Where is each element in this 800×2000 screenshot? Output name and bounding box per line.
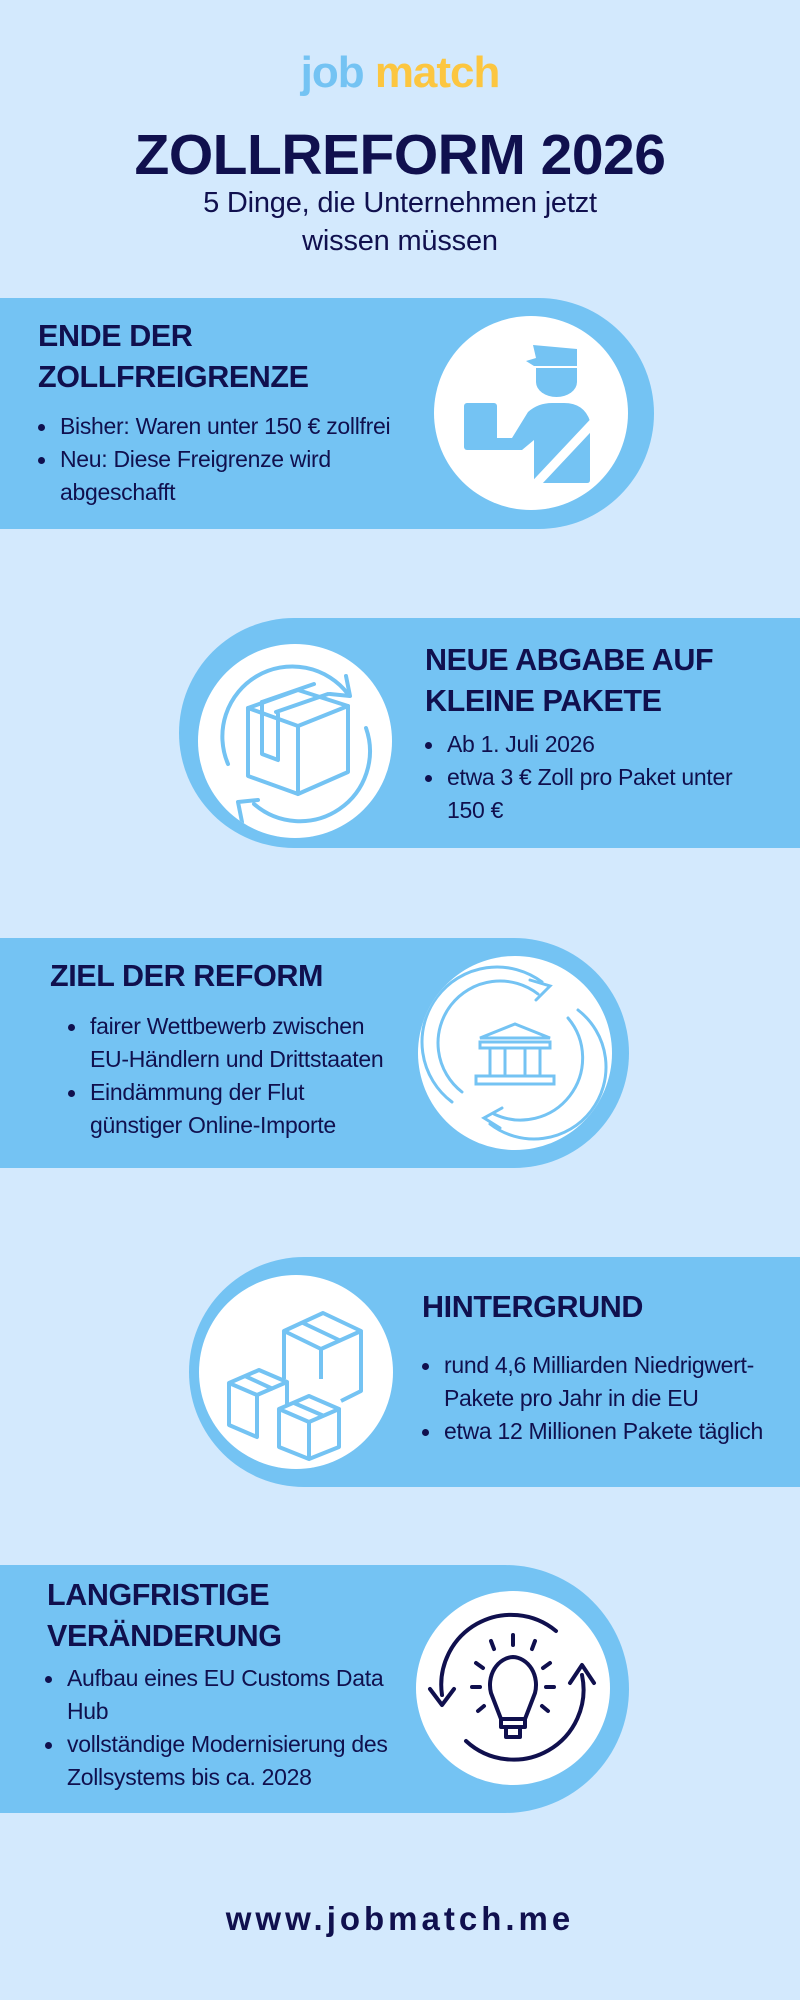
footer url: www.jobmatch.me <box>226 1900 574 1937</box>
bullets: Eindämmung der Flut <box>90 1079 304 1105</box>
bullets <box>425 731 732 823</box>
subtitle: 5 Dinge, die Unternehmen jetzt <box>203 187 597 219</box>
bullets: etwa 12 Millionen Pakete täglich <box>444 1418 763 1444</box>
bullets: vollständige Modernisierung des <box>67 1731 388 1757</box>
bullets: Ab 1. Juli 2026 <box>447 731 595 757</box>
bullets: fairer Wettbewerb zwischen <box>90 1013 364 1039</box>
heading: NEUE ABGABE AUF <box>425 643 713 677</box>
bullets: günstiger Online-Importe <box>90 1112 336 1138</box>
bullets: Zollsystems bis ca. 2028 <box>67 1764 312 1790</box>
heading: ZIEL DER REFORM <box>50 959 323 993</box>
title: ZOLLREFORM 2026 <box>135 123 665 187</box>
icon: light bulb with arrows <box>416 1591 610 1785</box>
heading: ENDE DER <box>38 319 192 353</box>
bullets: rund 4,6 Milliarden Niedrigwert- <box>444 1352 754 1378</box>
heading: VERÄNDERUNG <box>47 1619 282 1653</box>
panel: Hintergrund <box>189 1257 800 1487</box>
logo: job match <box>301 48 499 97</box>
icon: stacked boxes <box>199 1275 393 1469</box>
bullets: abgeschafft <box>60 479 175 505</box>
heading <box>38 319 309 394</box>
panel: Ziel der Reform <box>0 938 629 1168</box>
bullets: Neu: Diese Freigrenze wird <box>60 446 331 472</box>
icon: bank with arrows <box>418 956 612 1150</box>
bullets <box>68 1013 383 1138</box>
bullets <box>38 413 390 505</box>
heading <box>47 1578 282 1653</box>
panel: Ende der Zollfreigrenze <box>0 298 654 529</box>
icon: box with arrows <box>198 644 392 838</box>
bullets: Pakete pro Jahr in die EU <box>444 1385 699 1411</box>
heading: KLEINE PAKETE <box>425 684 662 718</box>
bullets: 150 € <box>447 797 503 823</box>
heading: ZOLLFREIGRENZE <box>38 360 309 394</box>
bullets: Aufbau eines EU Customs Data <box>67 1665 383 1691</box>
bullets: Hub <box>67 1698 108 1724</box>
icon: customs officer <box>434 316 628 510</box>
heading: LANGFRISTIGE <box>47 1578 269 1612</box>
bullets <box>422 1352 763 1444</box>
subtitle: wissen müssen <box>302 225 498 257</box>
panel: Langfristige Veränderung <box>0 1565 629 1813</box>
bullets <box>45 1665 388 1790</box>
bullets: Bisher: Waren unter 150 € zollfrei <box>60 413 390 439</box>
subtitle <box>203 187 597 257</box>
bullets: etwa 3 € Zoll pro Paket unter <box>447 764 732 790</box>
bullets: EU-Händlern und Drittstaaten <box>90 1046 383 1072</box>
heading <box>425 643 713 718</box>
heading: HINTERGRUND <box>422 1290 643 1324</box>
panel: Neue Abgabe auf kleine Pakete <box>179 618 800 848</box>
